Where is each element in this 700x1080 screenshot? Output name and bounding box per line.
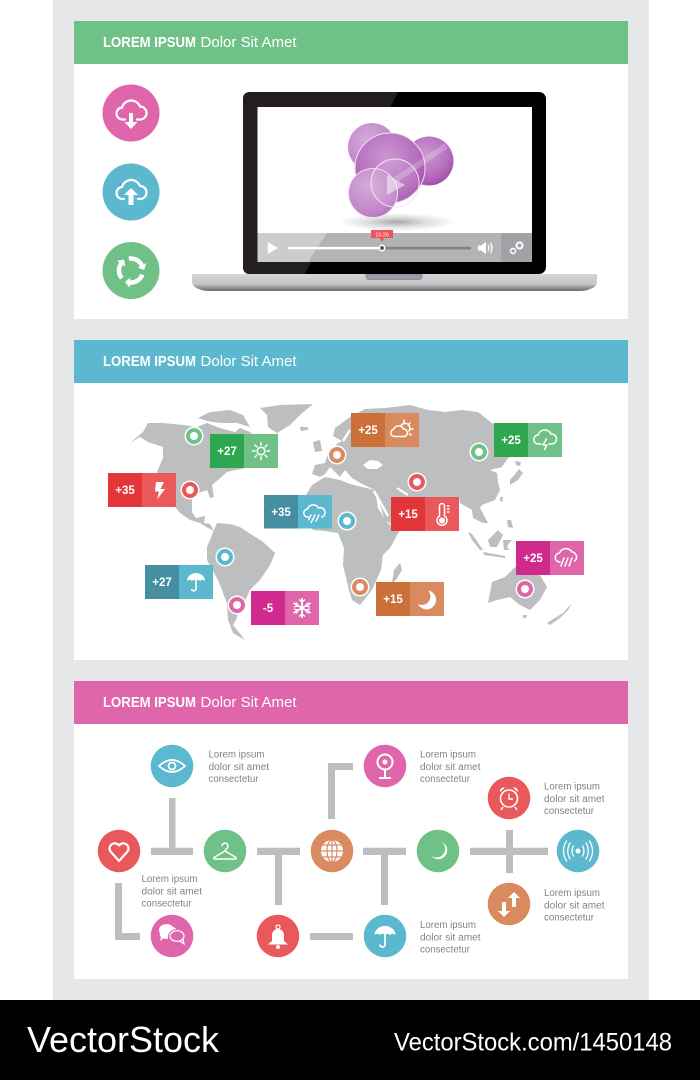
video control bar xyxy=(258,230,532,262)
heading: video panel xyxy=(74,21,628,64)
weather tag: +25 rain xyxy=(516,541,584,575)
laptop bezel xyxy=(243,92,546,274)
node: transfer arrows xyxy=(488,883,530,925)
weather tag: +25 cloud and sun xyxy=(351,413,419,447)
weather tag: +15 moon: +15 xyxy=(383,594,403,606)
node: webcam xyxy=(364,745,406,787)
node: moon xyxy=(417,830,459,872)
weather tag: +35 lightning xyxy=(108,473,176,507)
text: arrows caption xyxy=(544,888,605,924)
text: webcam caption: consectetur xyxy=(420,774,471,785)
node: globe xyxy=(311,830,353,872)
text: eye caption xyxy=(208,750,269,785)
text: arrows caption: dolor sit amet xyxy=(544,900,605,912)
connector: globe to moon and umbrella xyxy=(363,848,406,905)
panel: flow diagram xyxy=(74,681,628,979)
heading: flow panel: LOREM IPSUM xyxy=(103,695,196,711)
footer image id: VectorStock.com/1450148 xyxy=(394,1028,672,1056)
page background column xyxy=(53,0,649,1000)
connector: globe to webcam xyxy=(328,763,353,819)
time tooltip xyxy=(371,230,393,242)
node: heart xyxy=(98,830,140,872)
text: chat caption: dolor sit amet xyxy=(142,886,202,898)
weather tag: +25 rain: +25 xyxy=(523,553,543,565)
weather tag: +15 thermometer xyxy=(391,497,459,531)
weather tag: +27 sun: +27 xyxy=(217,446,237,458)
text: umbrella caption: Lorem ipsum xyxy=(420,920,476,931)
panel: world map xyxy=(74,340,628,660)
text: webcam caption xyxy=(420,750,481,785)
connector: bell to umbrella xyxy=(310,933,353,940)
text: clock caption: consectetur xyxy=(544,806,595,817)
spheres image xyxy=(339,123,455,231)
text: arrows caption: Lorem ipsum xyxy=(544,888,600,899)
text: umbrella caption: consectetur xyxy=(420,944,471,956)
volume icon xyxy=(478,242,492,254)
text: clock caption: Lorem ipsum xyxy=(544,782,600,792)
map pin: Europe xyxy=(328,446,346,464)
node: wireless signal xyxy=(557,830,599,872)
node: chat bubbles xyxy=(151,915,193,957)
map pin: Brazil xyxy=(216,548,234,566)
icon: cloud download xyxy=(102,84,160,142)
text: chat caption xyxy=(142,874,202,910)
laptop notch xyxy=(366,274,422,280)
play button xyxy=(268,242,278,254)
weather tag: +35 rain cloud xyxy=(264,495,332,528)
map pin: Middle East xyxy=(408,472,426,492)
connector: eye to heart and hanger xyxy=(151,798,193,855)
heading: flow panel xyxy=(74,681,628,724)
footer bar xyxy=(0,1000,700,1080)
text: webcam caption: dolor sit amet xyxy=(420,762,481,773)
gear icon xyxy=(510,242,522,254)
icon: cloud upload xyxy=(102,164,160,220)
text: umbrella caption: dolor sit amet xyxy=(420,932,481,944)
text: webcam caption: Lorem ipsum xyxy=(420,750,476,760)
heading: video panel: LOREM IPSUM xyxy=(103,35,196,51)
weather tag: -5 snow: -5 xyxy=(263,603,274,615)
weather tag: +35 lightning: +35 xyxy=(115,485,135,497)
map pin: South Africa xyxy=(350,578,370,596)
connector: heart to chat xyxy=(115,883,140,940)
heading: map panel xyxy=(74,340,628,383)
heading: map panel: Dolor Sit Amet xyxy=(200,354,296,370)
connector: moon cross xyxy=(470,830,548,873)
laptop xyxy=(192,92,597,291)
map pin: Canada xyxy=(184,426,204,446)
text: clock caption xyxy=(544,782,605,817)
map pin: USA xyxy=(180,480,200,500)
text: eye caption: dolor sit amet xyxy=(208,762,269,773)
weather tag: +25 storm cloud xyxy=(494,423,562,457)
icon: sync arrows xyxy=(102,242,160,299)
map pin: Chile xyxy=(228,596,246,614)
connector: hanger to globe and bell xyxy=(257,848,300,905)
world map xyxy=(130,404,572,640)
node: hanger xyxy=(204,830,246,872)
time tooltip: 15:26 xyxy=(375,232,389,238)
weather tag: +27 umbrella xyxy=(145,565,213,599)
weather tag: +27 umbrella: +27 xyxy=(152,577,172,589)
weather tag: +15 moon xyxy=(376,582,444,616)
text: umbrella caption xyxy=(420,920,481,956)
node: umbrella xyxy=(364,915,406,957)
text: clock caption: dolor sit amet xyxy=(544,794,605,805)
laptop base xyxy=(192,274,597,291)
progress track xyxy=(288,247,471,249)
node: alarm clock xyxy=(488,777,530,819)
text: chat caption: Lorem ipsum xyxy=(142,874,198,885)
text: eye caption: Lorem ipsum xyxy=(208,750,264,760)
heading: map panel: LOREM IPSUM xyxy=(103,354,196,370)
weather tag: +25 cloud and sun: +25 xyxy=(358,425,378,437)
weather tag: -5 snow xyxy=(251,591,319,625)
text: chat caption: consectetur xyxy=(142,898,192,910)
weather tag: +15 thermometer: +15 xyxy=(398,509,418,521)
weather tag: +35 rain cloud: +35 xyxy=(271,507,291,519)
text: eye caption: consectetur xyxy=(208,774,259,785)
panel: video player xyxy=(74,21,628,319)
footer logo: VectorStock xyxy=(27,1019,220,1060)
heading: flow panel: Dolor Sit Amet xyxy=(200,695,296,711)
node: bell xyxy=(257,915,299,957)
map pin: Africa xyxy=(338,512,356,530)
weather tag: +25 storm cloud: +25 xyxy=(501,435,521,447)
map pin: Australia xyxy=(516,580,534,598)
heading: video panel: Dolor Sit Amet xyxy=(200,35,296,51)
map pin: Asia xyxy=(470,442,488,462)
laptop screen xyxy=(258,107,532,262)
node: eye xyxy=(151,745,193,787)
weather tag: +27 sun xyxy=(210,434,278,468)
text: arrows caption: consectetur xyxy=(544,912,595,924)
